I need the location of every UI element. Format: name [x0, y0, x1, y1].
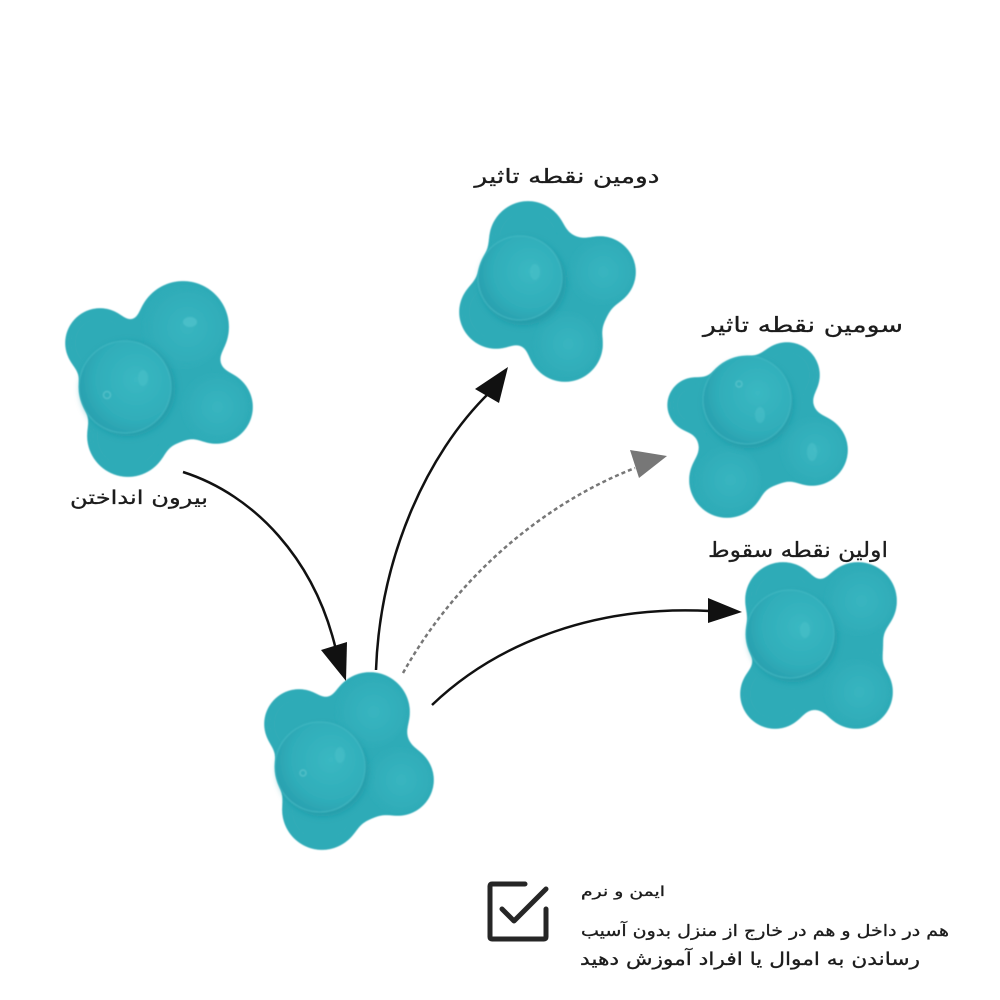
safety note text — [580, 921, 949, 970]
label: second impact point: دومین نقطه تاثیر — [473, 164, 660, 188]
ball: first landing — [740, 562, 897, 729]
arrow: bounce to first landing — [432, 598, 742, 705]
label: third impact point: سومین نقطه تاثیر — [702, 313, 903, 337]
safety note heading: ایمن و نرم — [581, 884, 665, 900]
ball: third impact — [667, 342, 848, 518]
arrow: throw to bounce — [183, 472, 347, 681]
label: first landing point: اولین نقطه سقوط — [708, 538, 888, 562]
arrow: bounce to second impact — [376, 367, 508, 670]
ball: second impact — [459, 201, 636, 382]
ball: thrown — [65, 281, 253, 477]
ball: bounce point — [264, 672, 434, 850]
arrow: bounce to third impact (dashed) — [403, 450, 667, 673]
safety note text: هم در داخل و هم در خارج از منزل بدون آسیب — [581, 921, 949, 941]
safety note text: رساندن به اموال یا افراد آموزش دهید — [580, 947, 920, 970]
label: throw: بیرون انداختن — [70, 487, 208, 509]
icon: checkbox — [490, 884, 546, 939]
